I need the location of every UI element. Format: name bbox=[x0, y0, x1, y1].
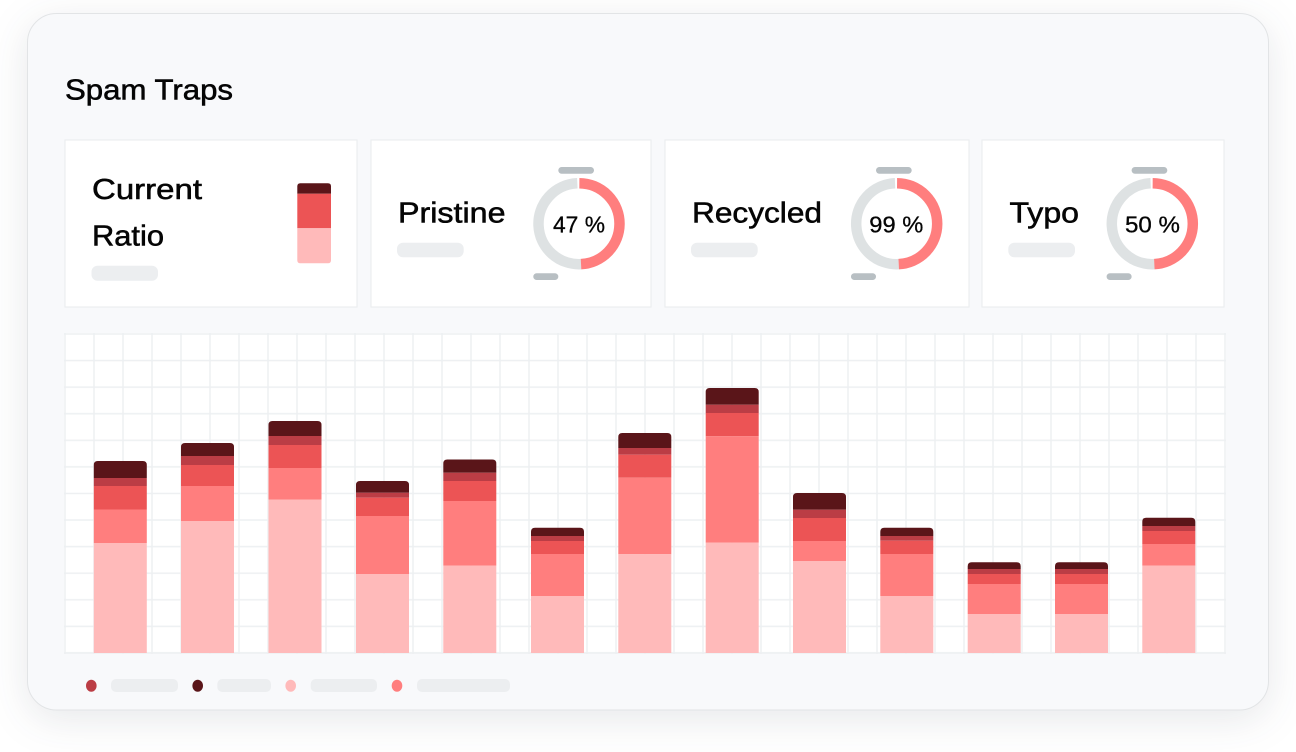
bar 12 bbox=[1055, 562, 1108, 653]
bar 6 bbox=[531, 528, 584, 653]
donut: typo 50 percent bbox=[1107, 167, 1195, 280]
panel: pristine card bbox=[371, 140, 651, 307]
heading: typo: Typo bbox=[1010, 197, 1079, 229]
bar 10 bbox=[880, 528, 933, 653]
panel: typo card bbox=[982, 140, 1224, 307]
placeholder text pill bbox=[92, 266, 158, 281]
placeholder text pill bbox=[397, 243, 464, 257]
bar 9 bbox=[793, 493, 846, 653]
heading: current ratio: Ratio bbox=[92, 221, 164, 253]
placeholder text pill bbox=[1008, 243, 1075, 257]
bar 7 bbox=[618, 433, 671, 653]
bar 3 bbox=[268, 421, 322, 653]
legend item: dark maroon bbox=[192, 679, 271, 692]
legend item: mid red bbox=[86, 679, 178, 692]
heading: current ratio bbox=[92, 174, 202, 253]
donut: pristine 47 percent bbox=[533, 167, 622, 280]
legend item: light pink bbox=[285, 679, 377, 692]
donut: recycled 99 percent bbox=[851, 167, 939, 280]
donut: recycled 99 percent: 99 % bbox=[869, 211, 923, 237]
bar 8 bbox=[706, 388, 759, 653]
bar 5 bbox=[443, 460, 496, 653]
donut: typo 50 percent: 50 % bbox=[1125, 211, 1180, 237]
icon: mini stacked ratio bar bbox=[297, 183, 331, 263]
placeholder text pill bbox=[691, 243, 758, 257]
heading: recycled: Recycled bbox=[692, 197, 822, 229]
bar 4 bbox=[356, 481, 409, 653]
bar 2 bbox=[181, 443, 234, 653]
donut: pristine 47 percent: 47 % bbox=[553, 211, 605, 237]
title: Spam Traps bbox=[65, 74, 233, 106]
legend bbox=[86, 679, 510, 692]
bar 1 bbox=[94, 461, 147, 653]
bar 13 bbox=[1142, 518, 1195, 653]
heading: current ratio: Current bbox=[92, 174, 202, 206]
bar chart: stacked bars on grid bbox=[64, 333, 1226, 654]
panel: current ratio card bbox=[65, 140, 357, 307]
heading: pristine: Pristine bbox=[398, 197, 506, 229]
legend item: salmon bbox=[392, 679, 510, 692]
bar 11 bbox=[968, 562, 1021, 653]
panel: recycled card bbox=[665, 140, 969, 307]
